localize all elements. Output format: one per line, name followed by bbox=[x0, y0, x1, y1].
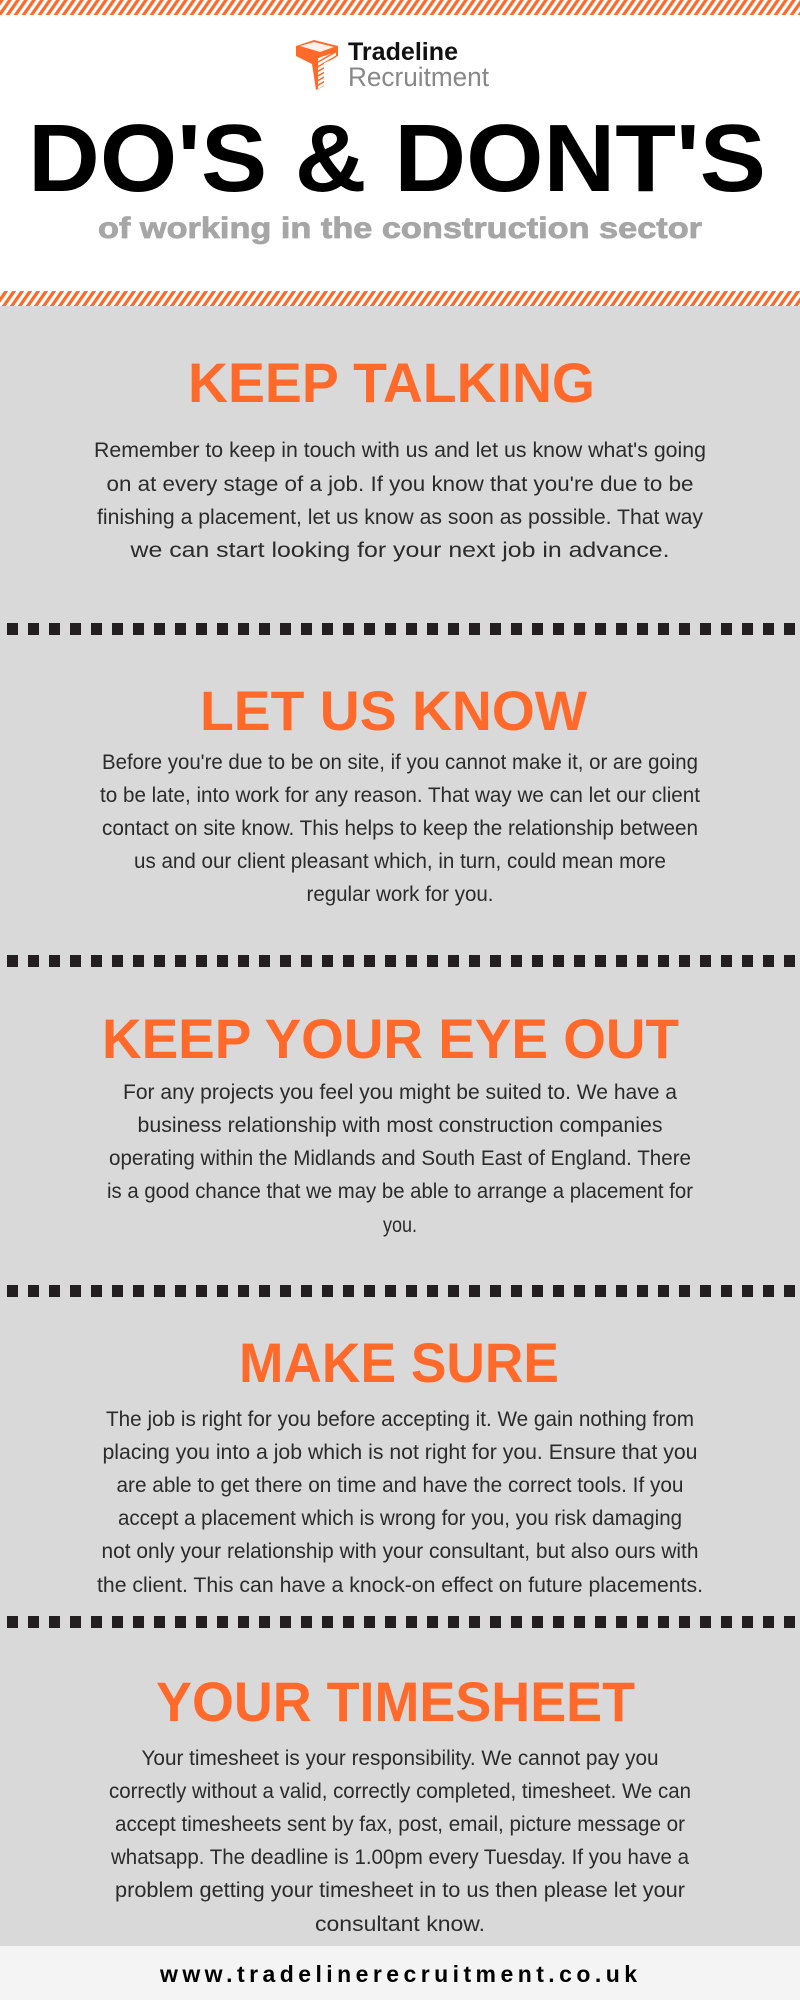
text block bbox=[94, 439, 706, 562]
text block: For any projects you feel you might be suited to. We have a bbox=[123, 1081, 677, 1104]
text block: Before you're due to be on site, if you cannot make it, or are going bbox=[102, 751, 698, 774]
panel: your timesheet bbox=[109, 1670, 691, 1936]
logo text: Recruitment bbox=[348, 62, 489, 92]
heading: KEEP TALKING bbox=[188, 351, 595, 414]
text block: not only your relationship with your consultant, but also ours with bbox=[102, 1540, 698, 1563]
heading: LET US KNOW bbox=[200, 679, 587, 742]
panel: keep your eye out bbox=[102, 1007, 693, 1237]
panel: make sure bbox=[97, 1331, 703, 1597]
text block: Remember to keep in touch with us and let us know what's going bbox=[94, 439, 706, 462]
text block: the client. This can have a knock-on effect on future placements. bbox=[97, 1574, 703, 1597]
text block bbox=[97, 1408, 703, 1597]
text block: accept timesheets sent by fax, post, email, picture message or bbox=[115, 1813, 685, 1836]
text block: operating within the Midlands and South East of England. There bbox=[109, 1147, 691, 1170]
text block: correctly without a valid, correctly completed, timesheet. We can bbox=[109, 1780, 691, 1803]
footer url: www.tradelinerecruitment.co.uk bbox=[159, 1961, 637, 1987]
heading: MAKE SURE bbox=[239, 1331, 559, 1394]
text block bbox=[100, 751, 700, 906]
text block: placing you into a job which is not right for you. Ensure that you bbox=[102, 1441, 698, 1464]
text block: on at every stage of a job. If you know that you're due to be bbox=[106, 473, 694, 496]
text block: regular work for you. bbox=[306, 883, 494, 906]
logo text: Tradeline bbox=[348, 38, 458, 66]
bottom header stripe bbox=[0, 291, 800, 306]
text block bbox=[107, 1081, 693, 1237]
text block: accept a placement which is wrong for you, you risk damaging bbox=[118, 1507, 682, 1530]
text block: we can start looking for your next job in advance. bbox=[129, 539, 670, 562]
icon: logo mark bbox=[296, 40, 338, 90]
text block: whatsapp. The deadline is 1.00pm every Tuesday. If you have a bbox=[110, 1846, 689, 1869]
logo text bbox=[348, 38, 489, 92]
top stripe bbox=[0, 0, 800, 15]
footer bbox=[0, 1946, 800, 2000]
text block: us and our client pleasant which, in turn, could mean more bbox=[134, 850, 666, 873]
text block: to be late, into work for any reason. That way we can let our client bbox=[100, 784, 700, 807]
text block: is a good chance that we may be able to arrange a placement for bbox=[107, 1180, 693, 1203]
title: DO'S & DONT'S bbox=[28, 105, 766, 212]
text block: Your timesheet is your responsibility. We cannot pay you bbox=[142, 1747, 658, 1770]
text block: problem getting your timesheet in to us then please let your bbox=[115, 1879, 685, 1902]
panel: keep talking bbox=[94, 351, 706, 562]
text block: finishing a placement, let us know as soon as possible. That way bbox=[97, 506, 703, 529]
text block: The job is right for you before accepting it. We gain nothing from bbox=[106, 1408, 694, 1431]
text block: contact on site know. This helps to keep the relationship between bbox=[102, 817, 698, 840]
logo bbox=[296, 38, 489, 92]
heading: KEEP YOUR EYE OUT bbox=[102, 1007, 679, 1070]
text block: consultant know. bbox=[315, 1913, 485, 1936]
text block: you. bbox=[383, 1214, 417, 1237]
text block bbox=[109, 1747, 691, 1936]
subtitle: of working in the construction sector bbox=[98, 212, 702, 245]
heading: YOUR TIMESHEET bbox=[156, 1670, 635, 1733]
panel: let us know bbox=[100, 679, 700, 906]
text block: are able to get there on time and have the correct tools. If you bbox=[116, 1474, 684, 1497]
text block: business relationship with most construction companies bbox=[138, 1114, 662, 1137]
